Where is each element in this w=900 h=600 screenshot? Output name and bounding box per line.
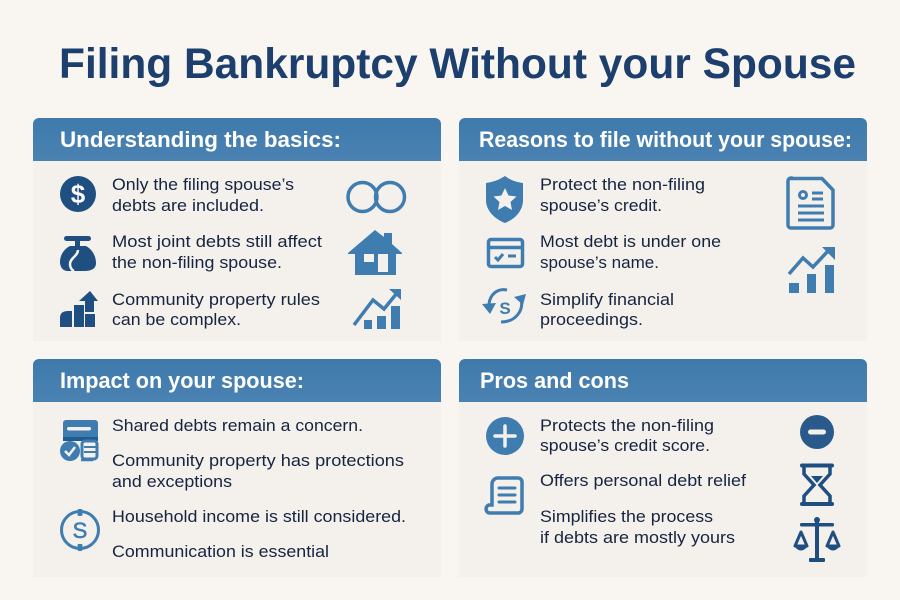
- text: simplifies process: [540, 507, 735, 547]
- icon: dollar cycle: [482, 290, 526, 322]
- icon: bill with check: [60, 420, 98, 461]
- text: joint debts: Most joint debts still affect: [112, 232, 322, 251]
- icon: dollar coin: $: [71, 179, 86, 209]
- icon: linked rings: [348, 182, 404, 212]
- icon: plus circle: [486, 417, 524, 455]
- panel: impact on your spouse: [33, 359, 441, 577]
- text: impact lines: Community property has protections: [112, 451, 404, 470]
- text: protects credit score: Protects the non-filing: [540, 416, 714, 435]
- text: filing spouse debts: Only the filing spouse’s: [112, 175, 294, 194]
- icon: money bag: [60, 236, 96, 271]
- icon: bars and up arrow: [60, 291, 98, 327]
- icon: hourglass: [800, 464, 834, 506]
- text: community property rules: Community property rules: [112, 290, 320, 309]
- icon: dollar cycle: S: [499, 299, 511, 318]
- text: simplifies process: if debts are mostly yours: [540, 528, 735, 547]
- text: joint debts: [112, 232, 322, 272]
- text: joint debts: the non-filing spouse.: [112, 253, 282, 272]
- panel: pros and cons: [459, 359, 867, 577]
- text: protect credit: spouse’s credit.: [540, 196, 662, 215]
- heading: pros and cons: [459, 359, 867, 402]
- text: impact lines: Household income is still considered.: [112, 507, 406, 526]
- heading: reasons to file: Reasons to file without your spouse:: [479, 127, 852, 152]
- heading: reasons to file: [459, 118, 867, 161]
- panel: reasons to file: [459, 118, 867, 341]
- icon: growth chart: [354, 289, 401, 329]
- panel: understanding the basics: [33, 118, 441, 341]
- text: simplifies process: Simplifies the process: [540, 507, 713, 526]
- title: Filing Bankruptcy Without your Spouse: [59, 40, 856, 88]
- text: protects credit score: spouse’s credit score.: [540, 436, 710, 455]
- icon: shield star: [486, 176, 523, 223]
- text: debt under one name: spouse’s name.: [540, 253, 659, 272]
- text: filing spouse debts: debts are included.: [112, 196, 264, 215]
- icon: house: [348, 230, 402, 275]
- icon: card with check: [488, 240, 523, 266]
- icon: scroll note: [486, 478, 522, 513]
- icon: growth chart: [789, 247, 835, 293]
- text: impact lines: and exceptions: [112, 472, 232, 491]
- icon: dollar ring: [62, 509, 98, 551]
- heading: impact on your spouse: Impact on your spouse:: [60, 368, 304, 393]
- text: impact lines: [112, 416, 406, 561]
- icon: document: [788, 178, 833, 228]
- text: impact lines: Communication is essential: [112, 542, 329, 561]
- heading: understanding the basics: Understanding the basics:: [60, 127, 341, 152]
- text: protects credit score: [540, 416, 714, 455]
- icon: scales: [794, 517, 840, 562]
- text: simplify proceedings: [540, 290, 674, 329]
- text: filing spouse debts: [112, 175, 294, 215]
- icon: dollar coin: [60, 176, 96, 212]
- text: impact lines: Shared debts remain a concern.: [112, 416, 363, 435]
- icon: minus circle: [800, 415, 834, 449]
- text: simplify proceedings: proceedings.: [540, 310, 643, 329]
- text: simplify proceedings: Simplify financial: [540, 290, 674, 309]
- text: debt under one name: Most debt is under one: [540, 232, 721, 251]
- text: community property rules: can be complex.: [112, 310, 241, 329]
- heading: impact on your spouse: [33, 359, 441, 402]
- heading: understanding the basics: [33, 118, 441, 161]
- text: offers relief: Offers personal debt relief: [540, 471, 746, 490]
- icon: dollar ring: S: [73, 518, 87, 543]
- text: debt under one name: [540, 232, 721, 272]
- text: protect credit: [540, 175, 705, 215]
- text: protect credit: Protect the non-filing: [540, 175, 705, 194]
- heading: pros and cons: Pros and cons: [480, 368, 629, 393]
- text: community property rules: [112, 290, 320, 329]
